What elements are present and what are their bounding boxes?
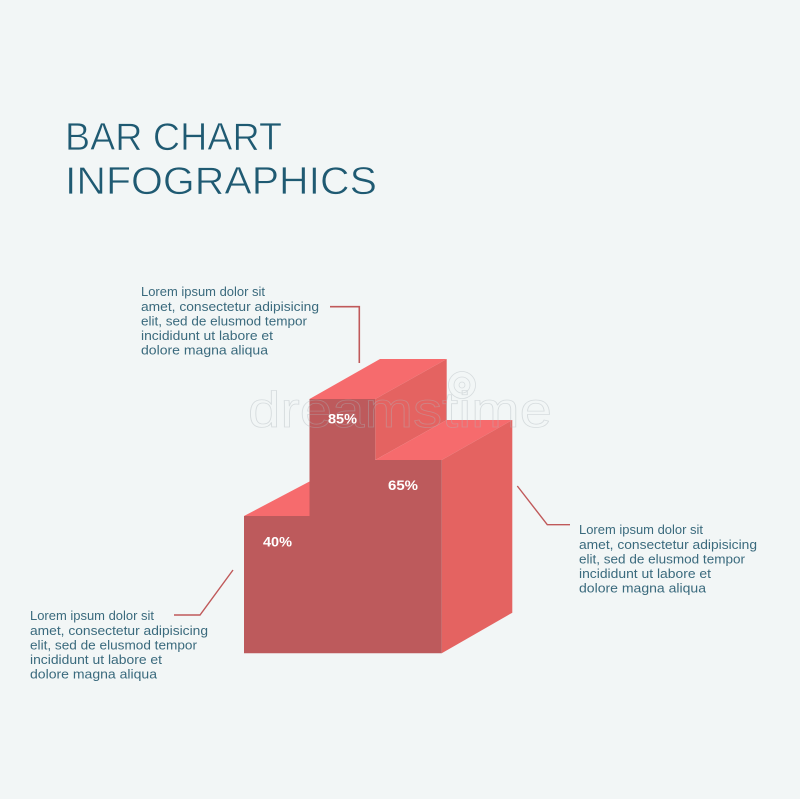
text block: top callout: incididunt ut labore et [141, 329, 274, 343]
text block: top callout [141, 285, 319, 358]
text block: right callout: dolore magna aliqua [579, 582, 706, 596]
stepped front face [244, 399, 442, 653]
title [65, 116, 377, 203]
text block: top callout: amet, consectetur adipisicing [141, 300, 319, 314]
text block: left callout: Lorem ipsum dolor sit [30, 609, 155, 623]
text block: right callout [579, 523, 757, 596]
title: INFOGRAPHICS [65, 160, 377, 203]
title: BAR CHART [65, 116, 282, 159]
text block: left callout: amet, consectetur adipisicing [30, 624, 208, 638]
bar 40% top face [244, 482, 310, 516]
stepped 3D bar chart [244, 359, 512, 653]
bar 65% side face [442, 420, 512, 653]
connector: right callout [517, 486, 570, 525]
percent label 65%: 65% [388, 477, 419, 493]
text block: left callout: incididunt ut labore et [30, 653, 163, 667]
percent label 85%: 85% [328, 410, 358, 426]
bar 65% top face [375, 420, 512, 460]
text block: left callout [30, 609, 208, 682]
text block: top callout: elit, sed de elusmod tempor [141, 314, 307, 328]
watermark: dreamstime [248, 382, 552, 438]
percent label 40%: 40% [263, 534, 293, 550]
connector: top callout [330, 307, 359, 363]
text block: left callout: elit, sed de elusmod tempor [30, 638, 197, 652]
text block: right callout: incididunt ut labore et [579, 567, 712, 581]
connector: left callout [174, 570, 233, 615]
bar 85% side face [375, 359, 447, 460]
text block: right callout: amet, consectetur adipisicing [579, 538, 757, 552]
text block: top callout: Lorem ipsum dolor sit [141, 285, 266, 299]
text block: right callout: elit, sed de elusmod tempor [579, 552, 745, 566]
text block: left callout: dolore magna aliqua [30, 668, 157, 682]
text block: right callout: Lorem ipsum dolor sit [579, 523, 704, 537]
bar 85% top face [310, 359, 447, 399]
text block: top callout: dolore magna aliqua [141, 344, 268, 358]
